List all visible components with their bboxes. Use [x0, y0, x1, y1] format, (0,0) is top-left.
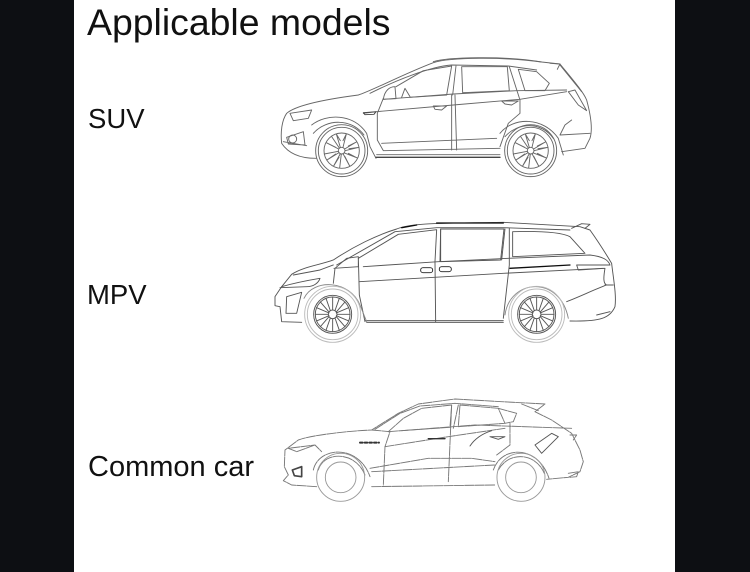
car: MPV: [275, 222, 615, 342]
title: Applicable models: [87, 1, 390, 43]
label: Common car: Common car: [88, 451, 254, 483]
car: SUV: [281, 58, 591, 177]
car: Common car: [283, 399, 583, 501]
label: SUV: SUV: [88, 102, 145, 134]
label: MPV: MPV: [87, 278, 147, 310]
